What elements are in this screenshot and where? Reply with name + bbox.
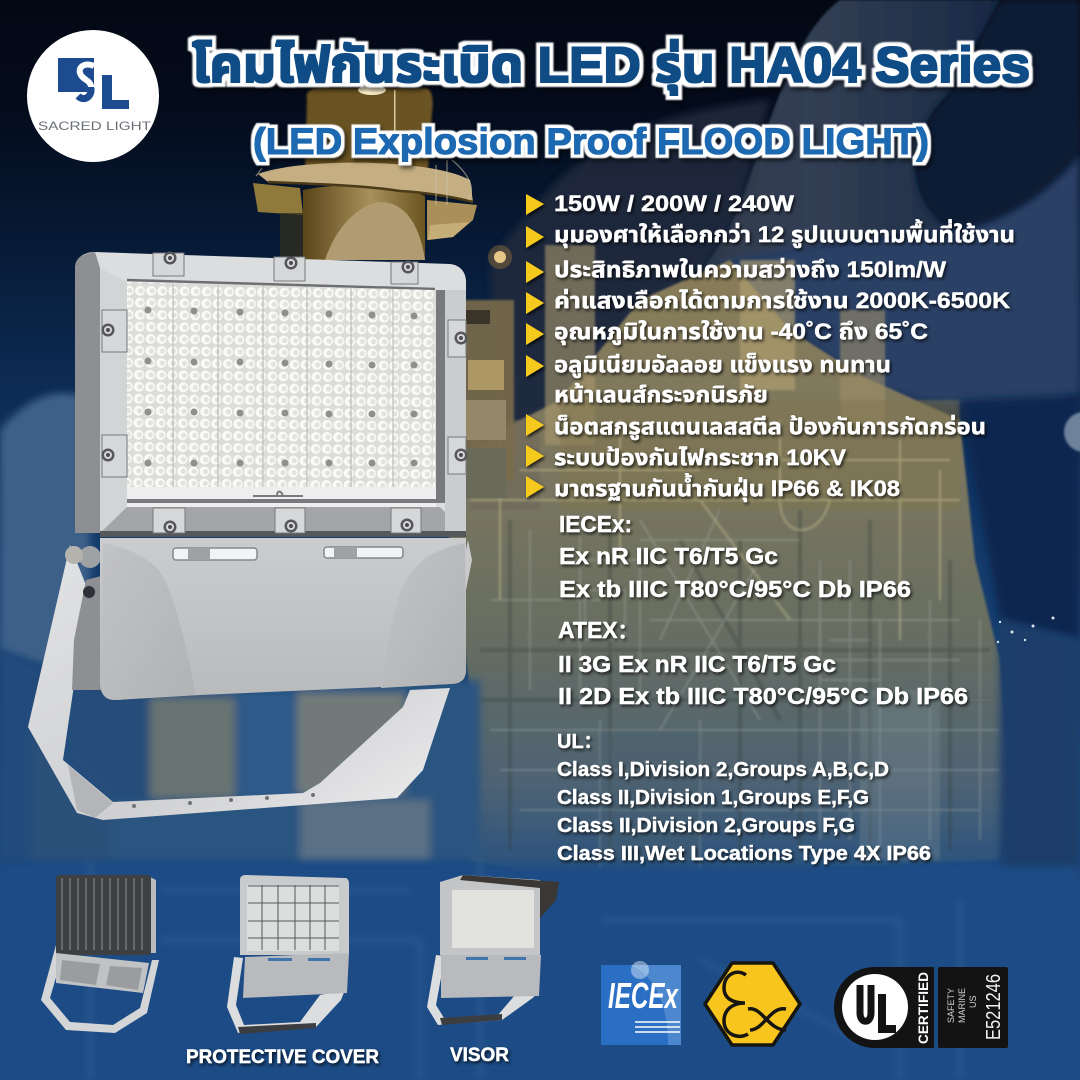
bullet: stainless screws: น็อตสกรูสแตนเลสสตีล ป้องกันการกัดกร่อน bbox=[554, 414, 986, 440]
IECEx block: Ex tb IIIC T80°C/95°C Db IP66 bbox=[559, 576, 911, 602]
UL file number: E521246 bbox=[983, 974, 1005, 1040]
lamp housing bbox=[100, 538, 466, 700]
bullet arrows bbox=[526, 194, 544, 498]
logo: Sacred Light bbox=[27, 30, 159, 162]
IECEx block: Ex nR IIC T6/T5 Gc bbox=[559, 543, 778, 569]
thumbnail: rear view bbox=[41, 875, 159, 1033]
housing label slots bbox=[173, 548, 257, 560]
tower-side plant visible right of the fixture bbox=[464, 300, 514, 498]
bullet: surge protection: ระบบป้องกันไฟกระชาก 10KV bbox=[554, 445, 846, 470]
IECEx block: IECEx: bbox=[559, 511, 632, 537]
ATEX block bbox=[558, 617, 968, 709]
title bbox=[192, 37, 1030, 162]
ATEX block: II 2D Ex tb IIIC T80°C/95°C Db IP66 bbox=[558, 683, 968, 709]
pale blob left bbox=[0, 393, 90, 680]
mounting bracket bbox=[28, 545, 450, 820]
accessory labels bbox=[186, 1045, 509, 1068]
logo wordmark: SACRED LIGHT bbox=[38, 119, 152, 133]
UL block: Class I,Division 2,Groups A,B,C,D bbox=[557, 759, 889, 781]
bullet: operating temperature: อุณหภูมิในการใช้งาน -40˚C ถึง 65˚C bbox=[554, 319, 928, 345]
thumbnail: visor bbox=[427, 875, 559, 1025]
bullet: beam angles: มุมองศาให้เลือกกว่า 12 รูปแบบตามพื้นที่ใช้งาน bbox=[554, 219, 1015, 248]
moon glow bbox=[1064, 412, 1080, 452]
bullet: ingress rating: มาตรฐานกันน้ำกันฝุ่น IP66 & IK08 bbox=[554, 473, 900, 502]
UL certified mark bbox=[834, 967, 1008, 1048]
refinery plant bbox=[440, 245, 1010, 880]
bullet: efficacy: ประสิทธิภาพในความสว่างถึง 150lm/W bbox=[554, 257, 946, 282]
right side dark sky bbox=[960, 395, 1080, 640]
IECEx certification mark bbox=[601, 961, 681, 1045]
label: visor: VISOR bbox=[450, 1045, 509, 1066]
lower blue backdrop bbox=[0, 866, 1080, 1080]
distant lights bbox=[997, 616, 1054, 643]
ATEX block: II 3G Ex nR IIC T6/T5 Gc bbox=[558, 651, 836, 677]
UL certified mark: US bbox=[968, 995, 978, 1008]
UL listing details: SAFETY bbox=[946, 988, 956, 1023]
LED panel bbox=[127, 282, 435, 487]
plant behind the bracket bbox=[30, 680, 480, 860]
ATEX block: ATEX： bbox=[558, 617, 638, 643]
UL block: Class III,Wet Locations Type 4X IP66 bbox=[557, 843, 931, 865]
UL monogram bbox=[860, 985, 871, 1021]
certification text bbox=[557, 511, 968, 865]
ATEX Ex hazard mark bbox=[705, 963, 800, 1045]
front frame bbox=[75, 252, 466, 533]
IECEx wordmark: IECEx bbox=[608, 975, 679, 1016]
flood light main product image bbox=[28, 252, 472, 820]
panel latch bbox=[253, 492, 303, 496]
illuminated tower bbox=[253, 85, 512, 269]
UL block: UL： bbox=[557, 731, 602, 753]
certified wordmark: CERTIFIED bbox=[916, 972, 931, 1044]
UL block: Class II,Division 2,Groups F,G bbox=[557, 815, 855, 837]
bullet: aluminium alloy: อลูมิเนียมอัลลอย แข็งแรง ทนทาน bbox=[554, 352, 891, 378]
frame screw blocks bbox=[102, 252, 468, 534]
feature bullet list bbox=[526, 191, 1015, 502]
label: protective cover: PROTECTIVE COVER bbox=[186, 1047, 379, 1068]
IECEx block bbox=[559, 511, 911, 602]
title line 1: โคมไฟกันระเบิด LED รุ่น HA04 Series bbox=[192, 37, 1030, 95]
bullet: colour temperature: ค่าแสงเลือกได้ตามการใช้งาน 2000K-6500K bbox=[554, 288, 1010, 313]
UL block bbox=[557, 731, 931, 865]
title line 2: (LED Explosion Proof FLOOD LIGHT) bbox=[253, 121, 929, 162]
bullet: safety glass lens: หน้าเลนส์กระจกนิรภัย bbox=[554, 382, 768, 407]
thumbnail: protective cover bbox=[227, 875, 349, 1034]
bullet: wattage: 150W / 200W / 240W bbox=[554, 191, 794, 216]
UL certified mark: MARINE bbox=[957, 988, 967, 1023]
abstract pale blob top right bbox=[500, 0, 1080, 520]
UL block: Class II,Division 1,Groups E,F,G bbox=[557, 787, 869, 809]
